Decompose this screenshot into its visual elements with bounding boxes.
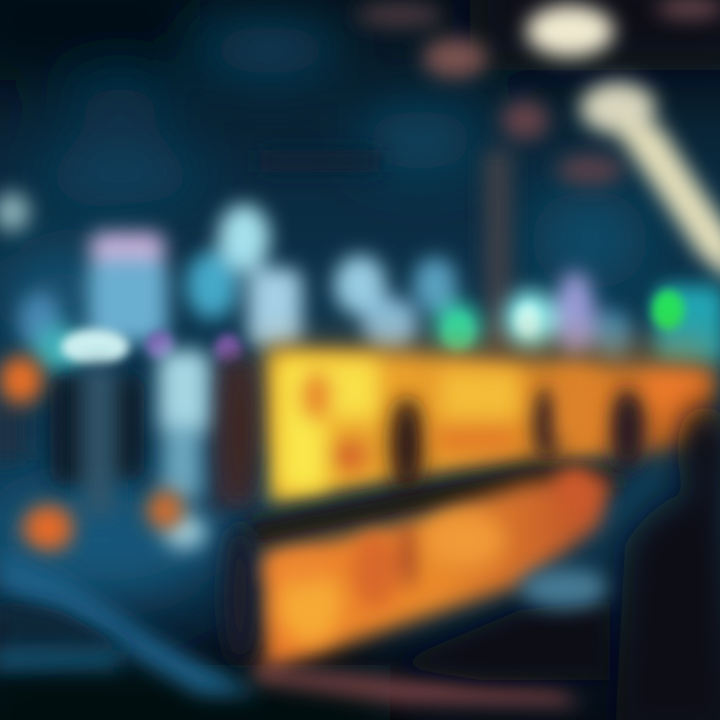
foreground silhouette: person at right (615, 405, 720, 720)
dark figures in left foreground (0, 360, 256, 515)
floor: reddish edge (250, 665, 580, 705)
pale blue floor glow (520, 568, 610, 608)
light: top panel (526, 5, 614, 57)
sign body (268, 350, 715, 505)
floor: lower left band (0, 650, 120, 668)
floor: blue diagonal band (0, 550, 260, 695)
reflection highlights (224, 466, 597, 665)
panel: glowing sign (226, 340, 715, 505)
sign letter: P (280, 360, 380, 490)
dark ledge under sign (245, 466, 620, 548)
pale figure centre-left (158, 350, 210, 550)
figure accents (61, 290, 684, 366)
sign dark gaps (226, 360, 646, 500)
dark floor wedge (390, 600, 610, 680)
sign glow (262, 340, 712, 450)
ceiling beams (260, 0, 720, 350)
light: angled strip (580, 82, 720, 285)
floor: dark corner (0, 600, 130, 670)
panel: sign reflection (224, 466, 610, 672)
sign highlights (435, 370, 705, 450)
figures: glowing blue silhouettes (0, 192, 720, 374)
orange lights (0, 356, 183, 551)
ceiling lights (526, 5, 720, 285)
